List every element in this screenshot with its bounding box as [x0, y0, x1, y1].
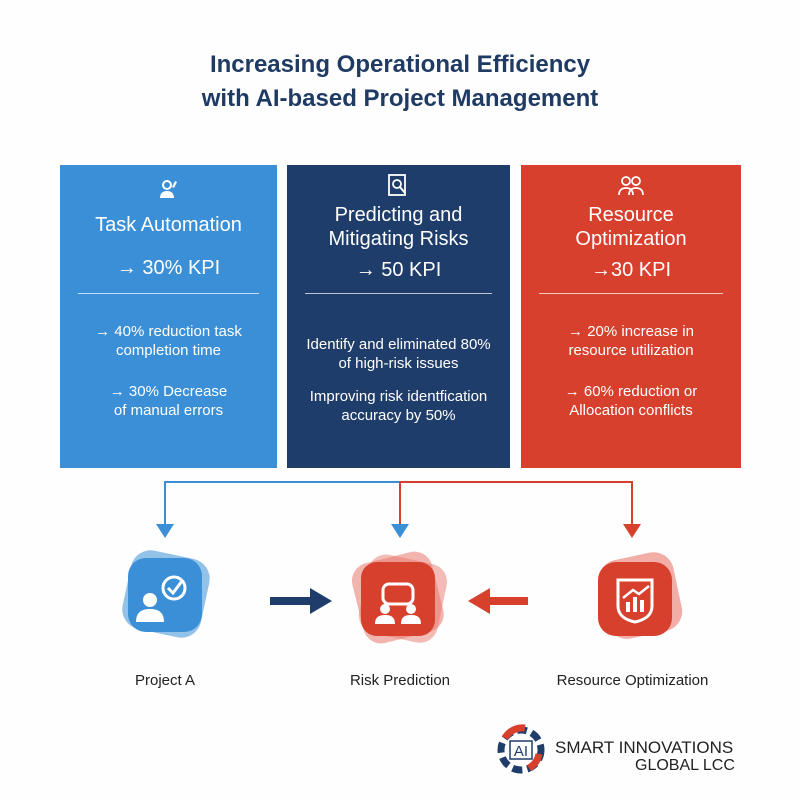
panel: task automation: Task Automation: [95, 214, 242, 236]
panel: task automation: of manual errors: [114, 402, 223, 419]
icon: resource optimization: [598, 552, 682, 639]
label: project A: Project A: [135, 672, 195, 689]
panel: task automation: completion time: [116, 342, 221, 359]
panel: risks: accuracy by 50%: [341, 407, 456, 424]
panel: resource optimization: →30 KPI: [591, 259, 671, 281]
panel: risks: → 50 KPI: [356, 259, 441, 281]
logo: GLOBAL LCC: [635, 757, 735, 774]
icon: project A: [122, 550, 210, 638]
panel: task automation: → 40% reduction task: [95, 323, 242, 340]
panel: resource optimization: → 60% reduction or: [565, 383, 697, 400]
icon: risk prediction: [352, 552, 447, 644]
panel: resource optimization: → 20% increase in: [568, 323, 694, 340]
logo: SMART INNOVATIONS: [555, 738, 733, 757]
panel: risks: of high-risk issues: [338, 355, 459, 372]
panel: resource optimization: Optimization: [575, 228, 687, 250]
title: Increasing Operational Efficiency: [210, 51, 590, 78]
panel: resource optimization: Allocation conflicts: [569, 402, 693, 419]
logo: [498, 724, 735, 774]
panel: task automation: → 30% Decrease: [110, 383, 227, 400]
panel: risks: Improving risk identfication: [310, 388, 487, 405]
arrow: navy right: [270, 588, 332, 614]
arrow: red left: [468, 588, 528, 614]
panel: risks: Mitigating Risks: [328, 228, 469, 250]
title: with AI-based Project Management: [202, 85, 598, 112]
panel: task automation: → 30% KPI: [117, 257, 220, 279]
label: risk prediction: Risk Prediction: [350, 672, 450, 689]
title: [202, 51, 598, 112]
icon: user: [160, 180, 177, 198]
icon: team: [618, 176, 644, 195]
panel: risks: Predicting and: [335, 204, 462, 226]
panel: risks: [287, 165, 510, 468]
panel: resource optimization: resource utilization: [568, 342, 694, 359]
icon: document: [388, 174, 406, 196]
logo: AI: [514, 743, 528, 760]
panel: resource optimization: Resource: [588, 204, 674, 226]
panel: resource optimization: [521, 165, 741, 468]
panel: task automation: [60, 165, 277, 468]
label: resource optimization: Resource Optimization: [557, 672, 708, 689]
panel: risks: Identify and eliminated 80%: [306, 336, 491, 353]
